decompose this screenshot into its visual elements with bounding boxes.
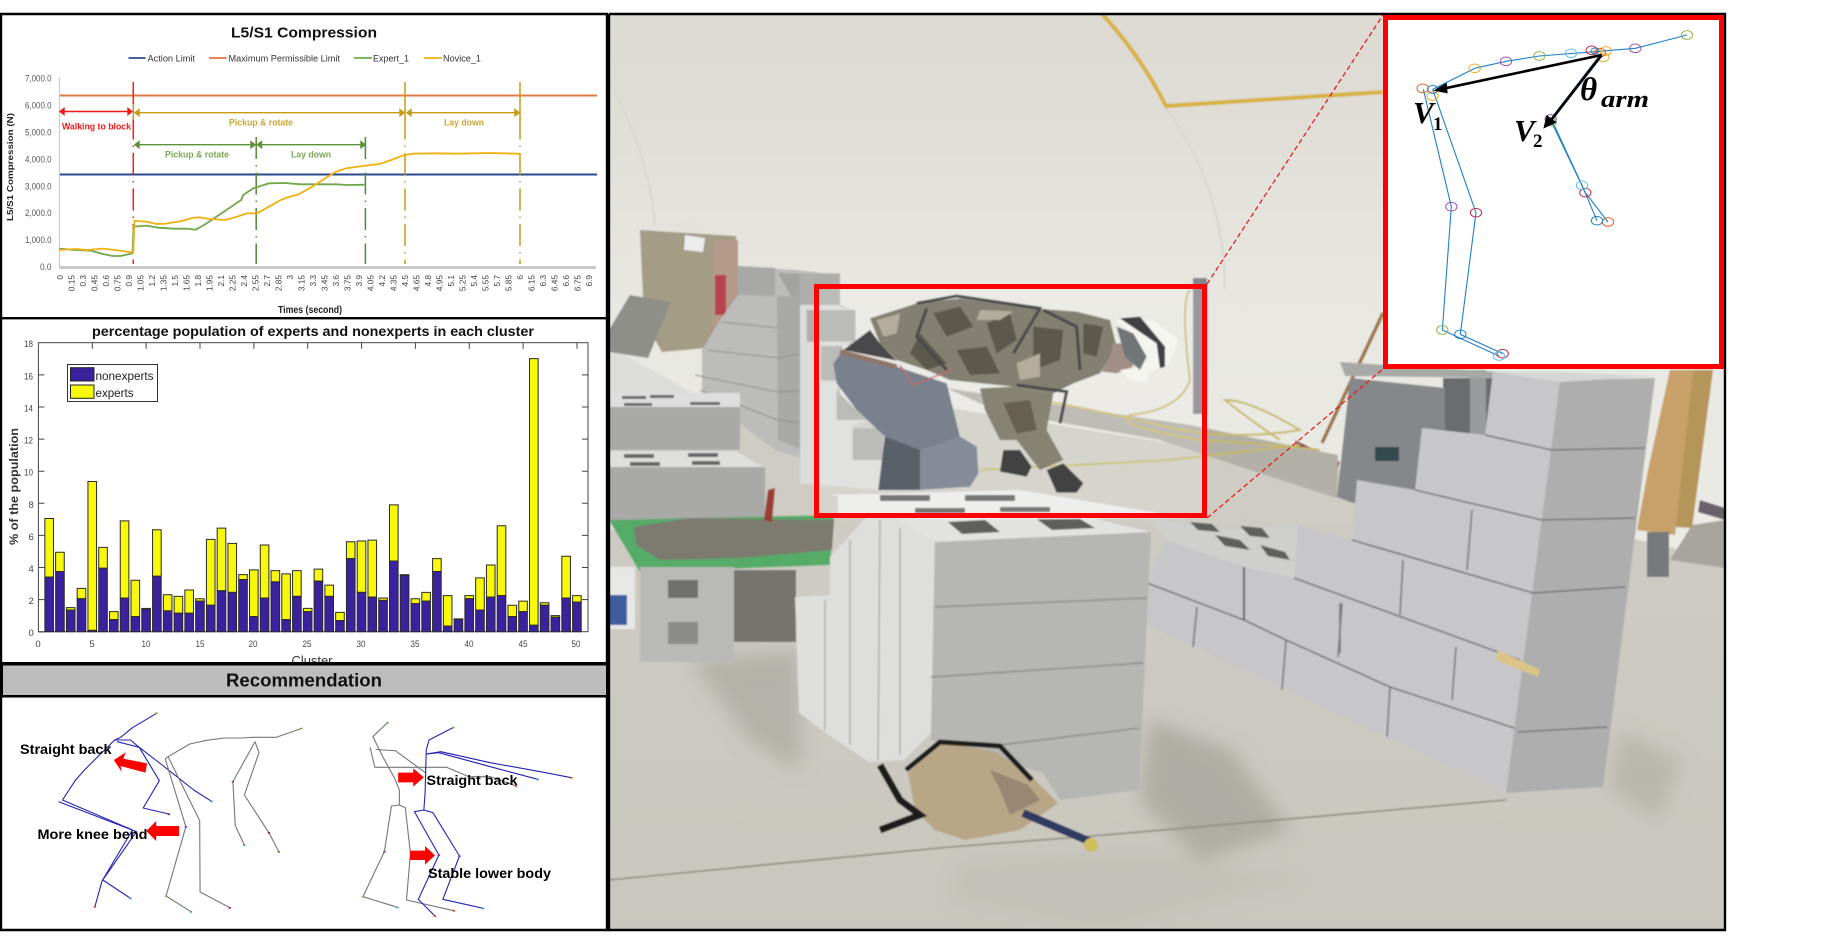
- x axis labels: 5.85: [504, 275, 514, 291]
- photo: stack top with holes: [830, 494, 1151, 542]
- photo: yellow cords: [980, 290, 1320, 470]
- bar chart y tick labels: 6: [28, 532, 34, 543]
- limit lines: [60, 96, 597, 174]
- bar chart y tick labels: 12: [24, 436, 33, 446]
- bar chart y tick labels: 4: [28, 564, 34, 575]
- bar chart legend: [68, 364, 158, 402]
- x axis labels: 6.15: [527, 275, 537, 291]
- x axis labels: 5.25: [458, 275, 468, 291]
- x axis labels: 3.15: [297, 275, 307, 291]
- y axis labels: 4,000.0: [25, 154, 52, 166]
- y axis labels: 7,000.0: [25, 74, 52, 84]
- y axis labels: 6,000.0: [25, 100, 52, 112]
- x axis labels: 1.95: [205, 275, 215, 291]
- recommendation heading: Recommendation: [226, 670, 382, 690]
- x axis title: Times (second): [278, 305, 342, 316]
- bar chart x tick labels: [35, 639, 580, 650]
- x axis labels: 4.05: [366, 275, 376, 291]
- x axis labels: 1.35: [159, 275, 169, 291]
- bar chart x tick labels: 5: [89, 639, 95, 650]
- photo: hammer: [1023, 813, 1098, 852]
- x axis labels: 3.3: [308, 275, 318, 287]
- panel: cluster bar chart: [7, 324, 588, 668]
- phase labels: Pickup & rotate: [165, 150, 229, 160]
- photo: floor shadows: [696, 647, 1676, 867]
- vector arrow V1: [1433, 55, 1602, 93]
- x axis labels: 4.8: [423, 275, 433, 287]
- bar chart y tick labels: 16: [24, 372, 33, 382]
- photo: masonry wall: [1147, 372, 1655, 793]
- photo: washed highlight inside detail box: [817, 287, 1204, 516]
- skeleton: left corrected posture (blue): [59, 713, 212, 907]
- photo: wall arches: [645, 170, 1226, 290]
- photo: conduit post: [1193, 278, 1207, 414]
- phase separators: [133, 82, 520, 264]
- x axis labels: 2.55: [251, 275, 261, 291]
- x axis labels: 6.3: [538, 275, 548, 287]
- bar chart x tick labels: 10: [142, 639, 150, 650]
- photo: low row top with holes: [1150, 518, 1300, 580]
- photo: yellow conduit: [1102, 14, 1383, 106]
- bar chart y tick labels: 18: [24, 339, 33, 350]
- highlight box around worker: [816, 286, 1204, 516]
- x axis labels: 2.1: [216, 275, 226, 287]
- y axis labels: [25, 74, 52, 273]
- bar chart x tick labels: 35: [410, 639, 420, 650]
- bar chart y tick labels: 14: [24, 404, 33, 414]
- photo: mortar joints: [1147, 435, 1645, 737]
- x axis labels: 4.65: [412, 275, 422, 291]
- bar chart title: percentage population of experts and nonexperts in each cluster: [92, 324, 535, 339]
- skeleton: left original posture (gray): [165, 728, 302, 912]
- x axis labels: 6: [515, 275, 525, 280]
- photo: wooden posts: [1637, 370, 1725, 577]
- phase labels: Walking to block: [62, 122, 132, 132]
- series: Expert_1: [59, 183, 365, 256]
- photo: worker: [800, 273, 1178, 493]
- x axis labels: 0.9: [124, 275, 134, 287]
- experts series: [45, 359, 581, 630]
- phase arrows: [60, 104, 520, 152]
- inset labels: vectors and angle: [1413, 72, 1649, 152]
- inset skeleton joints: [1417, 31, 1693, 360]
- bar chart x tick labels: 0: [35, 639, 41, 650]
- x axis labels: 0.3: [78, 275, 88, 287]
- arrow: straight back right: [398, 768, 424, 787]
- x axis labels: 1.2: [147, 275, 157, 287]
- photo: mortar board: [609, 515, 834, 662]
- skeleton: right corrected posture (blue): [414, 727, 571, 916]
- axes: [59, 78, 596, 268]
- recommendation labels: Straight back: [20, 741, 112, 757]
- recommendation labels: [20, 741, 551, 881]
- bar chart y tick labels: 8: [28, 500, 34, 511]
- x axis labels: 6.6: [561, 275, 571, 287]
- bar chart x tick labels: 20: [248, 639, 258, 650]
- bar chart x tick labels: 30: [356, 639, 366, 650]
- photo: tunnel wall: [610, 15, 1724, 549]
- bar chart y tick labels: 0: [28, 628, 34, 639]
- chart legend: [128, 54, 481, 64]
- photo: electrical box: [1337, 362, 1500, 503]
- x axis labels: 0.45: [90, 275, 100, 291]
- photo: worker camo patches: [910, 307, 1103, 375]
- x axis labels: 5.1: [446, 275, 456, 287]
- inset labels: vectors and angle: V: [1413, 95, 1436, 130]
- x axis labels: 3: [285, 275, 295, 280]
- photo: wall corner right face: [1506, 378, 1655, 793]
- chart title: L5/S1 Compression: [231, 24, 377, 42]
- x axis labels: 3.9: [354, 275, 364, 287]
- photo: worker camo jacket: [870, 298, 1117, 393]
- photo: slab leaning: [609, 295, 671, 358]
- photo: back stair blocks: [695, 266, 855, 470]
- x axis labels: 0.15: [67, 275, 77, 291]
- y axis labels: 0.0: [40, 262, 52, 273]
- inset labels: vectors and angle: V: [1514, 113, 1537, 148]
- bar chart y tick labels: 2: [28, 596, 34, 607]
- photo: blocks behind worker: [800, 273, 883, 490]
- panel: recommendation header: [1, 662, 607, 698]
- phase labels: Pickup & rotate: [229, 118, 293, 128]
- panel: recommendation skeletons: [20, 712, 573, 917]
- photo: concrete floor: [609, 400, 1725, 930]
- bar chart x tick labels: 45: [518, 639, 528, 650]
- chart legend: Expert_1: [373, 54, 409, 64]
- x axis labels: 2.25: [228, 275, 238, 291]
- nonexperts series: [45, 559, 581, 632]
- arrow: more knee bend: [146, 821, 179, 841]
- x axis labels: 0: [55, 275, 65, 280]
- x axis labels: 2.4: [239, 275, 249, 287]
- x axis labels: 6.75: [573, 275, 583, 291]
- photo: foreground block stack front: [931, 532, 1151, 800]
- divider: chart one / chart two: [1, 317, 607, 319]
- photo: worker helmet and face: [1102, 343, 1133, 373]
- x axis labels: 1.8: [193, 275, 203, 287]
- series lines: [59, 153, 520, 256]
- photo: tape measure: [1496, 650, 1540, 677]
- phase labels: [62, 118, 484, 160]
- photo: gravel strip: [946, 388, 1338, 498]
- x axis labels: 3.45: [320, 275, 330, 291]
- stacked bars: [45, 359, 581, 632]
- bar chart legend: nonexperts: [96, 369, 154, 383]
- inset skeleton limbs: [1423, 35, 1687, 356]
- photo: foreground block stack side: [795, 510, 935, 762]
- x axis labels: 1.05: [136, 275, 146, 291]
- inset labels: vectors and angle: arm: [1601, 87, 1649, 113]
- x axis labels: 3.6: [331, 275, 341, 287]
- photo: left foreground block rows: [609, 353, 765, 530]
- dashed callout lines to skeleton: [1207, 15, 1383, 518]
- phase labels: Lay down: [444, 118, 484, 128]
- x axis labels: 0.75: [113, 275, 123, 291]
- x axis labels: 4.5: [400, 275, 410, 287]
- x axis labels: 6.45: [550, 275, 560, 291]
- chart legend: Maximum Permissible Limit: [228, 54, 340, 64]
- chart legend: Action Limit: [148, 54, 195, 64]
- recommendation labels: Straight back: [426, 772, 518, 788]
- arrow: stable lower body: [410, 846, 435, 865]
- y axis title: L5/S1 Compression (N): [5, 113, 15, 221]
- x axis labels: 2.7: [262, 275, 272, 287]
- recommendation labels: Stable lower body: [428, 865, 551, 881]
- photo: front blocks inside detail box: [838, 490, 1190, 520]
- x axis labels: 5.55: [481, 275, 491, 291]
- bar chart x tick labels: 25: [302, 639, 312, 650]
- photo: worker jeans: [832, 354, 960, 451]
- x axis labels: 0.6: [101, 275, 111, 287]
- photo: tool bag: [880, 742, 1058, 840]
- x axis labels: 3.75: [343, 275, 353, 291]
- y axis labels: 2,000.0: [25, 208, 52, 219]
- y axis labels: 5,000.0: [25, 128, 52, 138]
- vector arrow V2: [1543, 55, 1602, 129]
- arrow: straight back left: [114, 752, 147, 773]
- bar chart x tick labels: 50: [572, 639, 580, 650]
- photo: broom: [1322, 313, 1383, 443]
- x axis labels: 4.2: [377, 275, 387, 287]
- bar chart x tick labels: 40: [464, 639, 474, 650]
- y axis labels: 3,000.0: [25, 182, 52, 192]
- x axis labels: 1.65: [182, 275, 192, 291]
- photo: trowel: [764, 488, 775, 522]
- y axis labels: 1,000.0: [25, 235, 52, 246]
- x axis labels: 6.9: [584, 275, 594, 287]
- x axis labels: [55, 275, 594, 291]
- photo: worker back strap and belt: [843, 330, 897, 361]
- skeleton joints: [94, 712, 573, 917]
- inset labels: vectors and angle: 2: [1533, 131, 1542, 152]
- inset labels: vectors and angle: θ: [1580, 72, 1597, 108]
- skeleton: right original posture (gray): [363, 723, 516, 911]
- plot frame and ticks: [38, 343, 588, 632]
- x axis labels: 4.95: [435, 275, 445, 291]
- panel: L5/S1 compression line chart: [5, 24, 597, 316]
- x axis labels: 4.35: [389, 275, 399, 291]
- x axis labels: 2.85: [274, 275, 284, 291]
- photo: worker front leg: [980, 387, 1063, 470]
- photo: worker boots and gloves: [1000, 450, 1083, 493]
- series: Novice_1: [59, 153, 520, 253]
- photo: worker harness: [917, 296, 1080, 423]
- x axis labels: 5.7: [492, 275, 502, 287]
- panel: skeleton inset: [1383, 15, 1724, 369]
- bar chart x axis title: Cluster: [292, 653, 333, 668]
- photo: wall left faces: [1190, 372, 1560, 792]
- chart legend: Novice_1: [443, 54, 481, 64]
- photo: insulation package: [640, 218, 738, 352]
- x axis labels: 5.4: [469, 275, 479, 287]
- phase labels: Lay down: [291, 150, 331, 160]
- bar chart x tick labels: 15: [196, 639, 204, 650]
- bar chart legend: experts: [96, 386, 134, 400]
- panel: site photo: [609, 14, 1725, 930]
- bar chart y tick labels: 10: [24, 468, 33, 478]
- photo: floor crack: [609, 800, 1506, 880]
- bar chart y axis title: % of the population: [7, 428, 21, 545]
- x axis labels: 1.5: [170, 275, 180, 287]
- bar chart y tick labels: [24, 339, 34, 639]
- inset labels: vectors and angle: 1: [1433, 114, 1442, 135]
- recommendation labels: More knee bend: [38, 826, 148, 842]
